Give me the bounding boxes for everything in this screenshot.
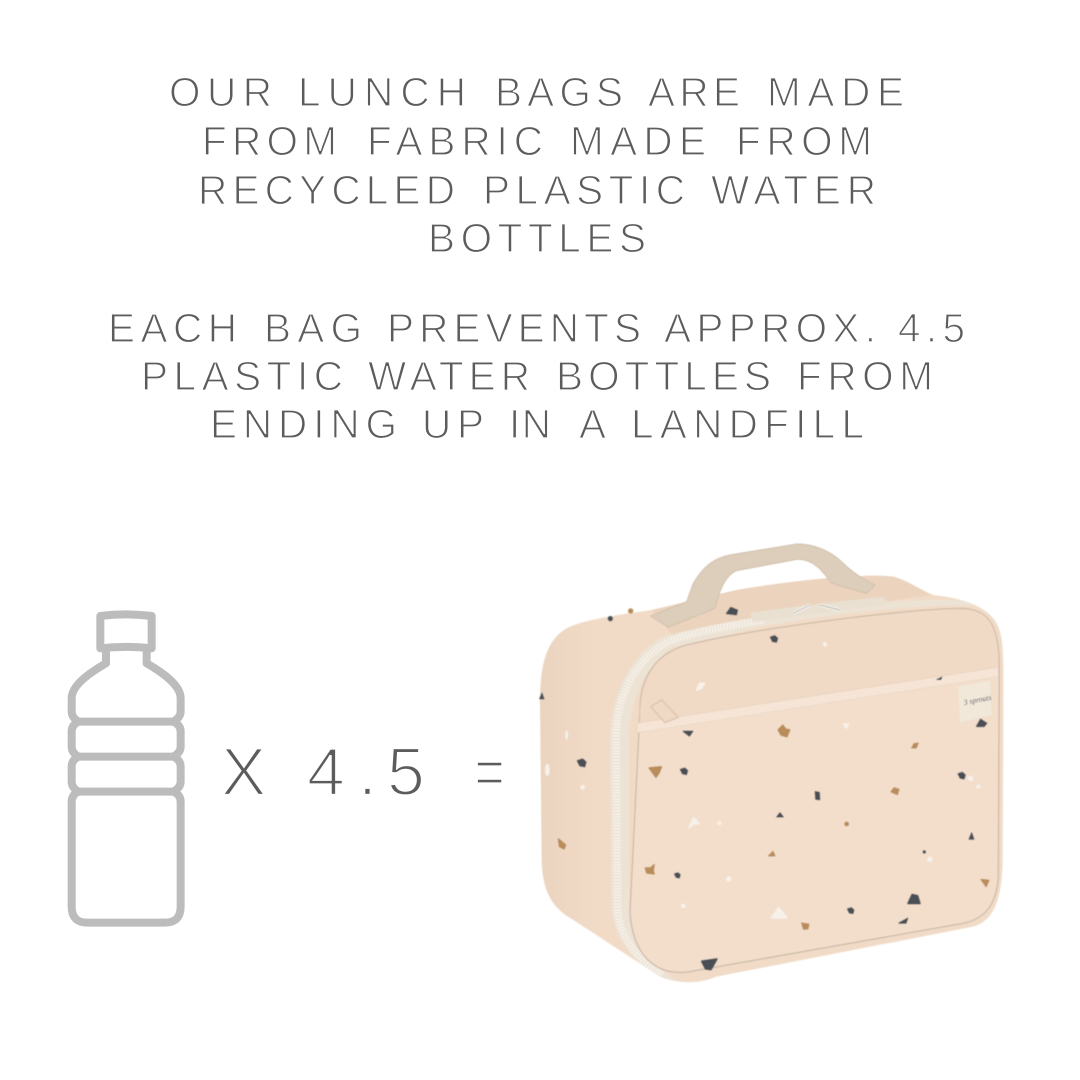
line: plastic water bottles from: WATER	[368, 353, 530, 399]
front panel	[630, 608, 999, 972]
line: each bag prevents approx. 4.5: EACH	[108, 305, 237, 351]
line: plastic water bottles from: FROM	[797, 353, 933, 399]
line: from fabric made from: MADE	[570, 118, 706, 164]
illustration: speckled lunch bag	[540, 544, 1003, 982]
zipper pulls	[750, 597, 888, 622]
line: each bag prevents approx. 4.5: 4.5	[898, 305, 965, 351]
text block: recycled fabric statement	[169, 69, 904, 261]
line: ending up in a landfill	[210, 401, 864, 447]
line: each bag prevents approx. 4.5: APPROX.	[664, 305, 876, 351]
terrazzo speckles	[540, 608, 987, 969]
line: ending up in a landfill: LANDFILL	[631, 401, 864, 447]
line: recycled plastic water: RECYCLED	[198, 167, 455, 213]
line: plastic water bottles from	[141, 353, 933, 399]
line: ending up in a landfill: UP	[422, 401, 484, 447]
line: plastic water bottles from: PLASTIC	[141, 353, 343, 399]
icon: plastic water bottle	[72, 614, 181, 923]
line: recycled plastic water	[198, 167, 876, 213]
bag body	[540, 576, 1003, 982]
equation: times 4.5 equals: 5	[387, 734, 425, 810]
equation: times 4.5 equals: 4	[307, 734, 345, 810]
line: our lunch bags are made: ARE	[648, 69, 740, 115]
line: from fabric made from: FABRIC	[367, 118, 543, 164]
line: our lunch bags are made: LUNCH	[298, 69, 466, 115]
line: each bag prevents approx. 4.5: PREVENTS	[387, 305, 641, 351]
equation: times 4.5 equals: .	[358, 734, 377, 810]
line: recycled plastic water: WATER	[711, 167, 876, 213]
zipper	[610, 600, 977, 981]
line: plastic water bottles from: BOTTLES	[556, 353, 771, 399]
top face	[652, 576, 933, 637]
handle strap	[651, 544, 875, 627]
line: recycled plastic water: PLASTIC	[483, 167, 685, 213]
line: ending up in a landfill: A	[579, 401, 606, 447]
line: our lunch bags are made: MADE	[767, 69, 904, 115]
line: each bag prevents approx. 4.5: BAG	[264, 305, 362, 351]
equation: times 4.5 equals: =	[474, 733, 505, 810]
upper panel above pocket	[640, 609, 999, 723]
sewn brand label	[958, 681, 992, 723]
equation: times 4.5 equals	[221, 733, 505, 810]
line: bottles: BOTTLES	[428, 215, 646, 261]
line: our lunch bags are made	[169, 69, 904, 115]
pocket fold	[637, 667, 998, 733]
line: our lunch bags are made: OUR	[169, 69, 272, 115]
line: from fabric made from	[202, 118, 872, 164]
line: from fabric made from: FROM	[202, 118, 337, 164]
pocket zip pull	[651, 700, 678, 723]
line: each bag prevents approx. 4.5	[108, 305, 965, 351]
equation: times 4.5 equals: X	[221, 734, 266, 810]
sewn brand label: 3 sprouts	[962, 693, 992, 707]
text block: bottles prevented statement	[108, 305, 965, 447]
line: our lunch bags are made: BAGS	[495, 69, 623, 115]
line: ending up in a landfill: IN	[509, 401, 551, 447]
line: from fabric made from: FROM	[736, 118, 872, 164]
line: ending up in a landfill: ENDING	[210, 401, 397, 447]
